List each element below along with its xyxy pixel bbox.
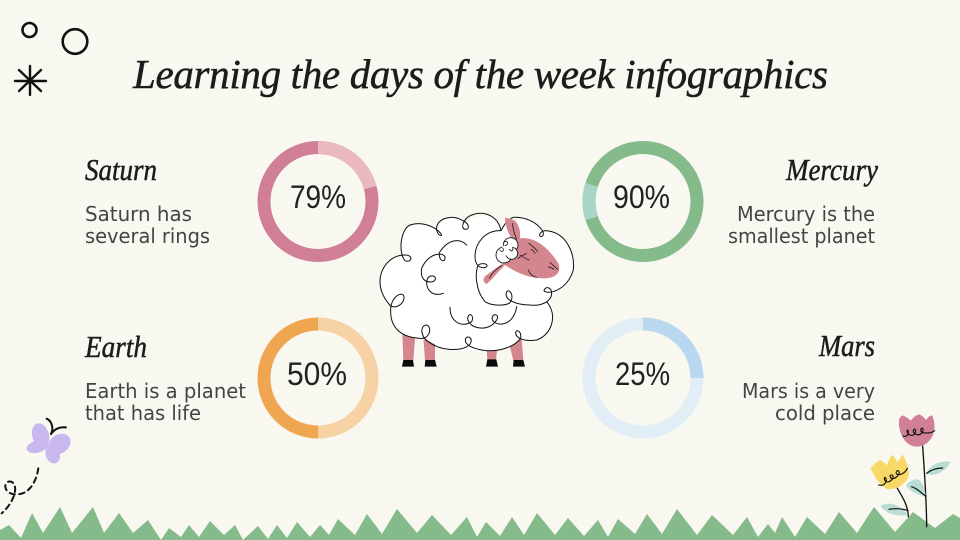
sheep hooves [402,359,525,367]
sheep pink face [483,217,559,284]
sheep legs [402,333,523,361]
butterfly wings [25,421,75,465]
sheep white wool fill [380,216,573,351]
donut chart: 25% [589,324,697,432]
text: Mercury description [728,202,875,248]
value: 25%: 25% [615,356,670,392]
dashed flight path [2,468,38,513]
donut chart: 50% [264,324,372,432]
grass strip [0,507,960,540]
icon: butterfly with dashed flight path [2,419,75,513]
heading: Mercury: Mercury [785,152,878,187]
illustration: tulips [871,414,951,527]
illustration: sheep [380,213,574,367]
heading: Mars: Mars [818,328,875,363]
text: Saturn description [85,202,210,248]
text: Mars description: cold place [775,401,875,425]
text: Earth description: Earth is a planet [85,379,246,403]
value: 90%: 90% [613,179,670,215]
face details [489,223,558,278]
sheep head curl [496,238,518,263]
tulip leaves [881,462,951,515]
text: Mars description [742,379,875,425]
donut chart: 79% [264,148,372,256]
text: Earth description: that has life [85,401,201,425]
text: Mercury description: Mercury is the [737,202,875,226]
value: 79%: 79% [290,179,346,215]
butterfly antennae [47,419,66,434]
panel: Earth [84,324,372,432]
sheep wool outline [380,213,574,351]
value: 50%: 50% [287,356,347,392]
text: Earth description [85,379,246,425]
text: Saturn description: Saturn has [85,202,192,226]
heading: Saturn: Saturn [85,152,157,187]
donut chart: 90% [589,148,697,256]
panel: Saturn [85,148,372,256]
text: Mercury description: smallest planet [728,224,875,248]
text: Mars description: Mars is a very [742,379,875,403]
heading: Earth: Earth [84,329,147,364]
tulip stems [897,446,927,527]
pink tulip head [899,414,934,447]
yellow tulip head [871,455,909,489]
decorative doodles: circles and asterisk [15,23,87,95]
panel: Mars [589,324,875,432]
leaf veins [889,468,943,511]
text: Saturn description: several rings [85,224,210,248]
panel: Mercury [589,148,878,256]
yellow tulip curls [879,468,907,485]
pink tulip curls [903,428,935,436]
title: Learning the days of the week infographics [132,51,828,97]
